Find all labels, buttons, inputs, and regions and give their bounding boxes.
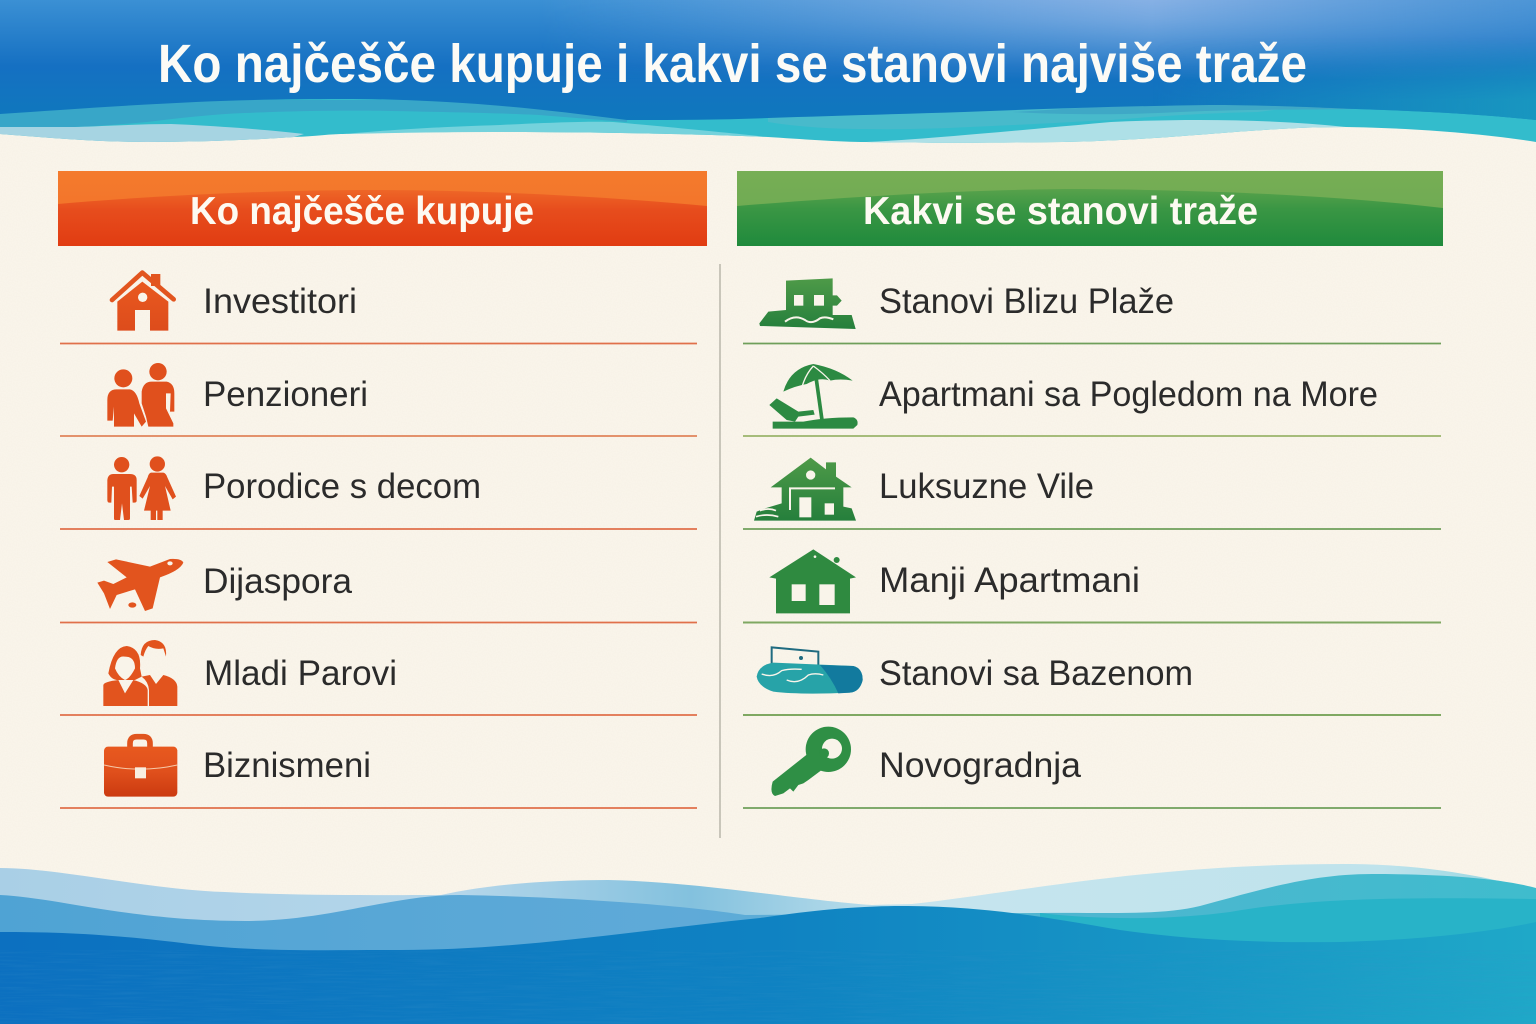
label: Dijaspora: Dijaspora	[203, 562, 353, 601]
label: Investitori: Investitori	[203, 282, 357, 321]
heading: who buys	[58, 171, 707, 246]
icon: house	[112, 273, 174, 331]
row: Mladi Parovi	[60, 640, 697, 715]
panel: who buys most often	[58, 171, 707, 808]
icon: beach building	[759, 278, 856, 329]
panel: what apartments are sought	[737, 171, 1443, 808]
label: Stanovi sa Bazenom: Stanovi sa Bazenom	[879, 654, 1193, 693]
bottom sea waves	[0, 864, 1536, 1024]
label: Penzioneri: Penzioneri	[203, 375, 368, 414]
row: Stanovi sa Bazenom	[743, 647, 1441, 715]
row: Penzioneri	[60, 363, 697, 436]
icon: airplane	[97, 559, 183, 611]
label: Manji Apartmani: Manji Apartmani	[879, 561, 1140, 600]
row: Manji Apartmani	[743, 549, 1441, 622]
row: Luksuzne Vile	[743, 458, 1441, 529]
title: Ko najčešče kupuje i kakvi se stanovi najviše traže	[158, 34, 1307, 94]
heading: what apartments	[737, 171, 1443, 246]
icon: key	[771, 727, 851, 796]
icon: briefcase	[104, 737, 177, 797]
label: Biznismeni: Biznismeni	[203, 746, 371, 785]
row: Investitori	[60, 273, 697, 344]
icon: villa	[754, 458, 856, 521]
row: Porodice s decom	[60, 456, 697, 529]
heading: what apartments: Kakvi se stanovi traže	[863, 190, 1258, 233]
row: Apartmani sa Pogledom na More	[743, 364, 1441, 436]
row: Biznismeni	[60, 737, 697, 808]
icon: man and woman	[107, 456, 176, 520]
label: Stanovi Blizu Plaže: Stanovi Blizu Plaže	[879, 282, 1174, 321]
top sea banner	[0, 0, 1536, 143]
icon: small house	[769, 549, 856, 613]
label: Luksuzne Vile: Luksuzne Vile	[879, 467, 1094, 506]
icon: young couple	[103, 640, 177, 706]
label: Porodice s decom: Porodice s decom	[203, 467, 481, 506]
label: Mladi Parovi: Mladi Parovi	[204, 654, 397, 693]
icon: elderly couple	[107, 363, 174, 427]
heading: who buys: Ko najčešče kupuje	[190, 190, 534, 233]
row: Novogradnja	[743, 727, 1441, 808]
icon: swimming pool	[757, 647, 863, 694]
row: Stanovi Blizu Plaže	[743, 278, 1441, 344]
icon: beach umbrella and lounger	[769, 364, 858, 429]
label: Apartmani sa Pogledom na More: Apartmani sa Pogledom na More	[879, 375, 1378, 414]
label: Novogradnja: Novogradnja	[879, 746, 1082, 785]
row: Dijaspora	[60, 559, 697, 622]
